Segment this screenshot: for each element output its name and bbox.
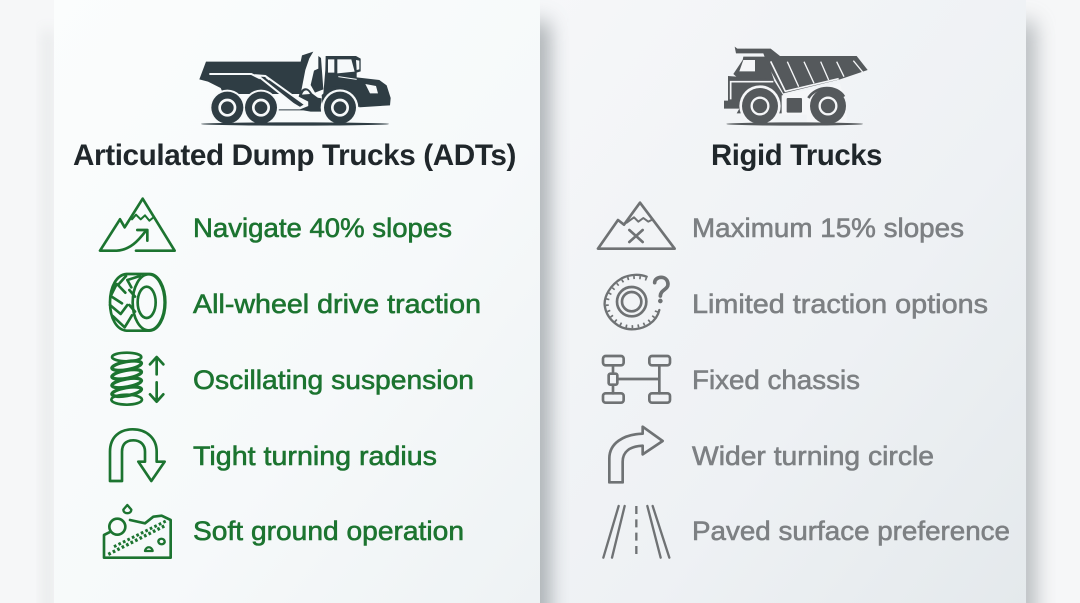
icon: rigid truck [724,47,868,127]
label: Wider turning circle [692,441,934,471]
label: Fixed chassis [692,365,860,395]
item: maximum 15% slopes [598,203,964,249]
icon: mountain with x [598,203,675,249]
item: limited traction options [605,275,988,329]
item: paved surface preference [603,506,1010,558]
icon: tire [110,274,165,331]
item: all-wheel drive traction [110,274,481,331]
label: Limited traction options [692,289,988,319]
icon: u-turn arrow [110,429,165,481]
label: Oscillating suspension [193,365,474,395]
icon: coil spring with arrows [111,353,163,405]
icon: road [603,506,669,558]
item: oscillating suspension [111,353,474,405]
icon: soft ground with tire track [104,505,171,558]
label: Soft ground operation [193,516,464,546]
item: wider turning circle [609,427,934,482]
panel: rigid trucks background [540,0,1034,603]
label: Navigate 40% slopes [193,213,452,243]
heading: rigid trucks: Rigid Trucks [711,139,882,172]
item: navigate 40% slopes [100,199,452,251]
label: Tight turning radius [193,441,437,471]
icon: right turn arrow [609,427,663,482]
label: All-wheel drive traction [193,289,481,319]
icon: tire with question mark [605,275,668,329]
item: fixed chassis [603,356,860,403]
label: Paved surface preference [692,516,1010,546]
icon: mountain with up arrow [100,199,175,251]
panel: articulated dump trucks background [44,0,548,603]
label: Maximum 15% slopes [692,213,964,243]
item: soft ground operation [104,505,464,558]
heading: articulated dump trucks: Articulated Dump Trucks (ADTs) [73,139,516,172]
item: tight turning radius [110,429,437,481]
icon: articulated dump truck [199,52,391,127]
icon: chassis frame [603,356,670,403]
